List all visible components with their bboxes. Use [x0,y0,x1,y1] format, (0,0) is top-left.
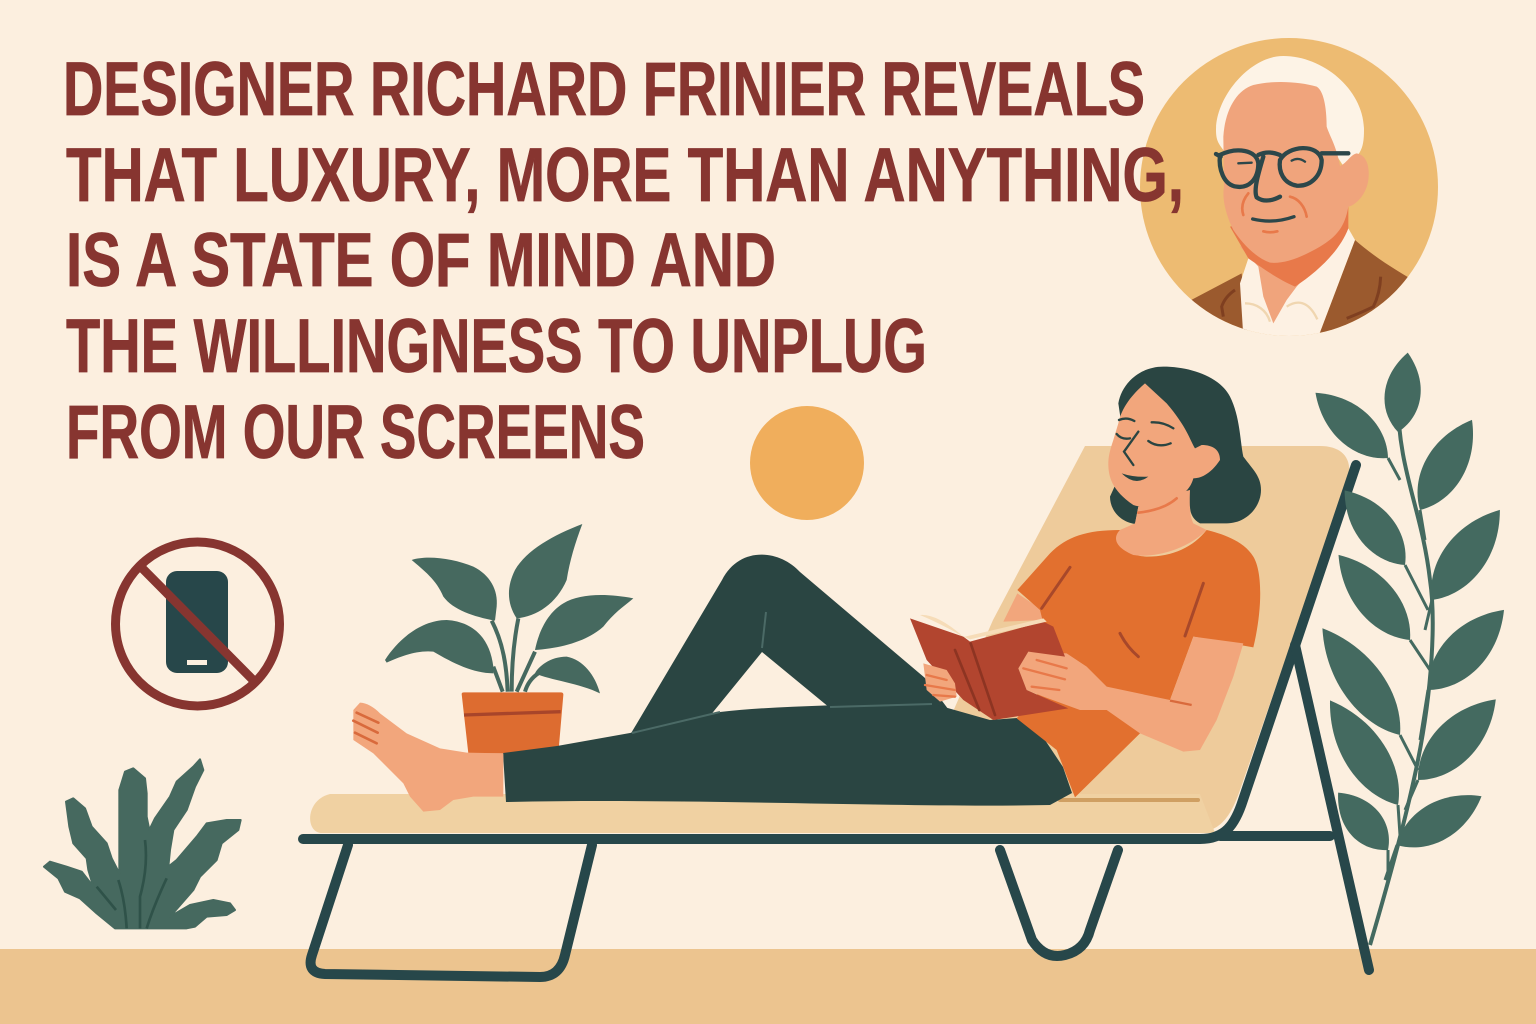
floor band [0,949,1536,1024]
sun [750,406,864,520]
potted plant [385,524,633,753]
bent leg [630,555,960,735]
title: IS A STATE OF MIND AND [66,218,776,303]
shirt [1017,530,1260,797]
portrait of Richard Frinier [1140,38,1438,340]
right tall plant [1303,350,1519,945]
hands [923,663,957,702]
hair [1110,367,1261,524]
straight leg [503,703,1072,806]
title: THE WILLINGNESS TO UNPLUG [66,304,927,389]
lounge chair [303,446,1369,977]
near arm [1018,637,1243,752]
title: DESIGNER RICHARD FRINIER REVEALS [63,47,1145,132]
foot [353,703,503,812]
upper body and head [910,367,1261,797]
reclining woman reading [353,367,1261,812]
icon: no phone [116,542,280,706]
far arm [1003,593,1043,622]
neck [1116,490,1207,556]
title: FROM OUR SCREENS [66,390,645,475]
small floor plant [44,759,241,928]
seat cushion [310,794,1215,833]
chair back cushion [900,446,1349,833]
title [63,47,1184,475]
title: THAT LUXURY, MORE THAN ANYTHING, [66,133,1184,218]
face [1108,383,1220,507]
book [910,618,1068,720]
